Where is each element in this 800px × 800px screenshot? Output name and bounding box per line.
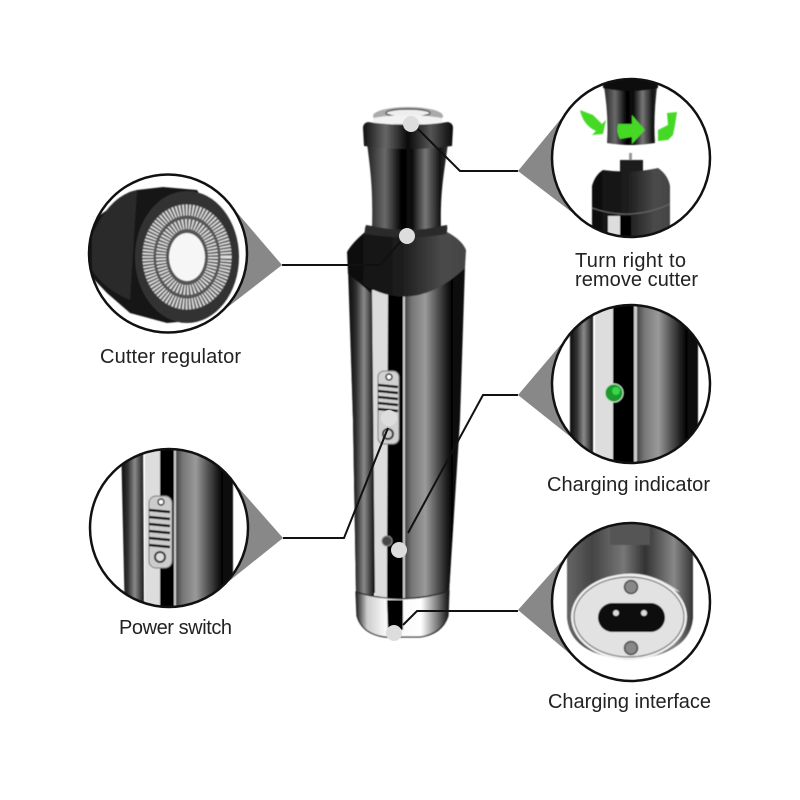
label: Turn right to xyxy=(575,250,686,272)
callout: power switch xyxy=(90,410,397,639)
magnified cutter xyxy=(85,174,247,332)
magnified switch xyxy=(90,440,248,620)
callout: charging interface xyxy=(386,520,711,713)
leader line xyxy=(283,428,388,538)
shaver head cap xyxy=(363,122,453,149)
shaver silver base xyxy=(356,591,449,637)
green arrows xyxy=(580,110,677,144)
shaver shoulder xyxy=(347,232,466,297)
label: Charging interface xyxy=(548,691,711,713)
shaver barrel xyxy=(348,266,465,600)
marker dot xyxy=(381,410,397,426)
label: Charging indicator xyxy=(547,474,710,496)
charging indicator on body xyxy=(382,536,392,546)
shaver body xyxy=(347,107,466,637)
leader line xyxy=(417,128,518,171)
magnified interface xyxy=(552,520,710,681)
callout: cutter regulator xyxy=(85,174,415,368)
pointer triangle xyxy=(518,333,582,446)
pointer triangle xyxy=(218,476,283,590)
pointer triangle xyxy=(216,202,282,316)
callout: turn right to remove cutter xyxy=(403,78,710,291)
pointer triangle xyxy=(518,108,583,221)
pointer triangle xyxy=(518,549,580,662)
leader line xyxy=(403,611,518,625)
shaver head cutter xyxy=(373,107,443,125)
marker dot xyxy=(386,625,402,641)
label: Cutter regulator xyxy=(100,346,241,368)
marker dot xyxy=(403,116,419,132)
magnified indicator xyxy=(552,300,710,470)
label line two: remove cutter xyxy=(575,269,698,291)
label: Power switch xyxy=(119,617,232,639)
leader line xyxy=(408,395,518,533)
marker dot xyxy=(399,228,415,244)
shaver neck xyxy=(367,143,448,230)
callout: charging indicator xyxy=(391,300,710,558)
marker dot xyxy=(391,542,407,558)
magnified cutter removal xyxy=(552,78,710,246)
power switch on body xyxy=(378,371,399,444)
shaver collar xyxy=(365,225,447,238)
leader line xyxy=(282,240,402,265)
